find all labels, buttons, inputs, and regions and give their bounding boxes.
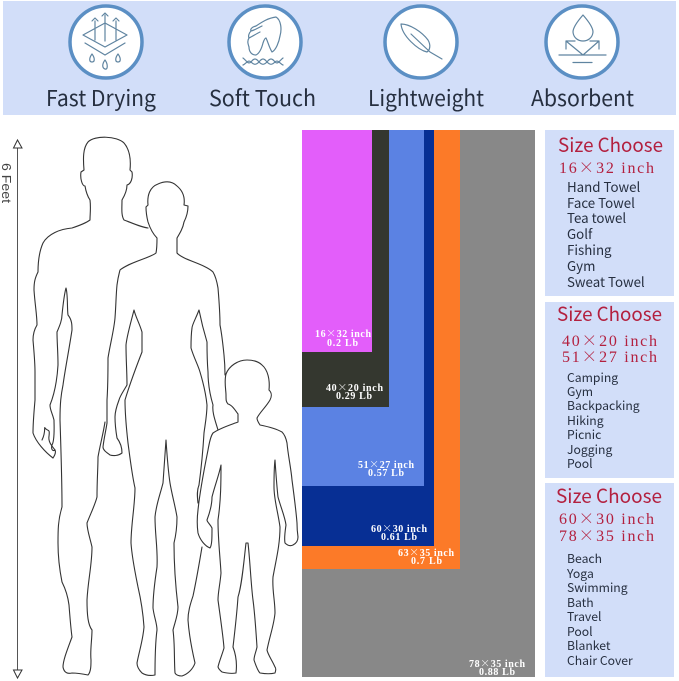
use list: Gym xyxy=(567,382,593,400)
heading: Size Choose xyxy=(557,298,662,327)
label: 60x30 xyxy=(371,520,427,543)
use list: Swimming xyxy=(567,578,628,596)
size block: 63x35 xyxy=(302,130,460,569)
label: 78x35: 78×35 inch xyxy=(469,655,525,670)
use list xyxy=(567,368,640,472)
use list: Jogging xyxy=(567,440,612,458)
icon: fast drying xyxy=(70,6,142,78)
use list: Bath xyxy=(567,593,594,611)
label: 51x27: 0.57 Lb xyxy=(368,468,404,479)
panel: size 60x30 and 78x35 uses xyxy=(545,480,674,677)
label: Fast Drying: Fast Drying xyxy=(46,81,157,113)
use list: Fishing xyxy=(567,240,612,259)
figure: man hand detail xyxy=(42,428,55,450)
figure: man xyxy=(33,137,148,675)
label: 16x32: 0.2 Lb xyxy=(327,338,358,349)
label: 60x30: 60×30 inch xyxy=(371,520,427,535)
size lines: 51×27 inch xyxy=(562,344,657,367)
height arrow: 6 feet xyxy=(0,140,22,678)
use list: Hiking xyxy=(567,411,604,429)
size lines: 60×30 inch xyxy=(559,506,654,529)
use list: Backpacking xyxy=(567,396,640,414)
label: 40x20: 40×20 inch xyxy=(326,379,383,394)
icon: absorbent xyxy=(546,6,618,78)
size lines: 40×20 inch xyxy=(562,328,657,351)
chart: towel size comparison xyxy=(302,130,535,678)
icon: lightweight feather xyxy=(385,6,457,78)
figures: man, woman, child outlines xyxy=(33,137,298,676)
use list: Travel xyxy=(567,607,601,625)
use list: Sweat Towel xyxy=(567,272,645,291)
heading: Size Choose xyxy=(558,129,663,158)
figure: woman xyxy=(103,182,225,676)
panel: size 40x20 and 51x27 uses xyxy=(545,298,674,478)
use list: Chair Cover xyxy=(567,651,633,669)
label: 16x32 xyxy=(315,325,371,349)
size lines xyxy=(562,328,657,367)
label: Absorbent: Absorbent xyxy=(531,81,634,113)
use list: Gym xyxy=(567,256,595,275)
size block: 78x35 xyxy=(302,130,535,677)
use list: Blanket xyxy=(567,636,611,654)
label: 78x35 xyxy=(469,655,525,678)
panel: feature banner xyxy=(3,1,676,115)
label: 16x32: 16×32 inch xyxy=(315,325,371,340)
label: 40x20: 0.29 Lb xyxy=(336,391,372,402)
use list: Camping xyxy=(567,368,618,386)
use list: Picnic xyxy=(567,425,601,443)
panel: size 16x32 uses xyxy=(545,129,674,296)
label: 63x35 xyxy=(398,544,454,567)
label: 78x35: 0.88 Lb xyxy=(479,667,515,678)
figure: child xyxy=(197,360,298,674)
label: Soft Touch: Soft Touch xyxy=(209,81,316,113)
use list: Yoga xyxy=(566,564,594,582)
size block: 51x27 xyxy=(302,130,424,486)
label: 51x27 xyxy=(358,456,414,479)
label: 40x20 xyxy=(326,379,383,402)
label: 63x35: 0.7 Lb xyxy=(411,556,442,567)
size block: 40x20 xyxy=(302,130,389,407)
size line: 16×32 inch xyxy=(559,155,654,178)
use list: Hand Towel xyxy=(567,177,640,196)
size block: 60x30 xyxy=(302,130,434,546)
use list: Pool xyxy=(567,622,593,640)
use list: Pool xyxy=(567,454,593,472)
size lines xyxy=(559,506,654,546)
heading: Size Choose xyxy=(556,480,662,509)
use list: Tea towel xyxy=(567,208,626,227)
label: 63x35: 63×35 inch xyxy=(398,544,454,559)
label: 51x27: 51×27 inch xyxy=(358,456,414,471)
icon: soft touch xyxy=(229,6,301,78)
label: Lightweight: Lightweight xyxy=(368,81,484,113)
use list xyxy=(567,177,645,291)
size lines: 78×35 inch xyxy=(559,523,654,546)
use list: Golf xyxy=(567,224,593,243)
size block: 16x32 xyxy=(302,130,372,352)
use list xyxy=(566,549,633,669)
use list: Beach xyxy=(567,549,602,567)
use list: Face Towel xyxy=(567,193,635,212)
label: 60x30: 0.61 Lb xyxy=(381,532,417,543)
